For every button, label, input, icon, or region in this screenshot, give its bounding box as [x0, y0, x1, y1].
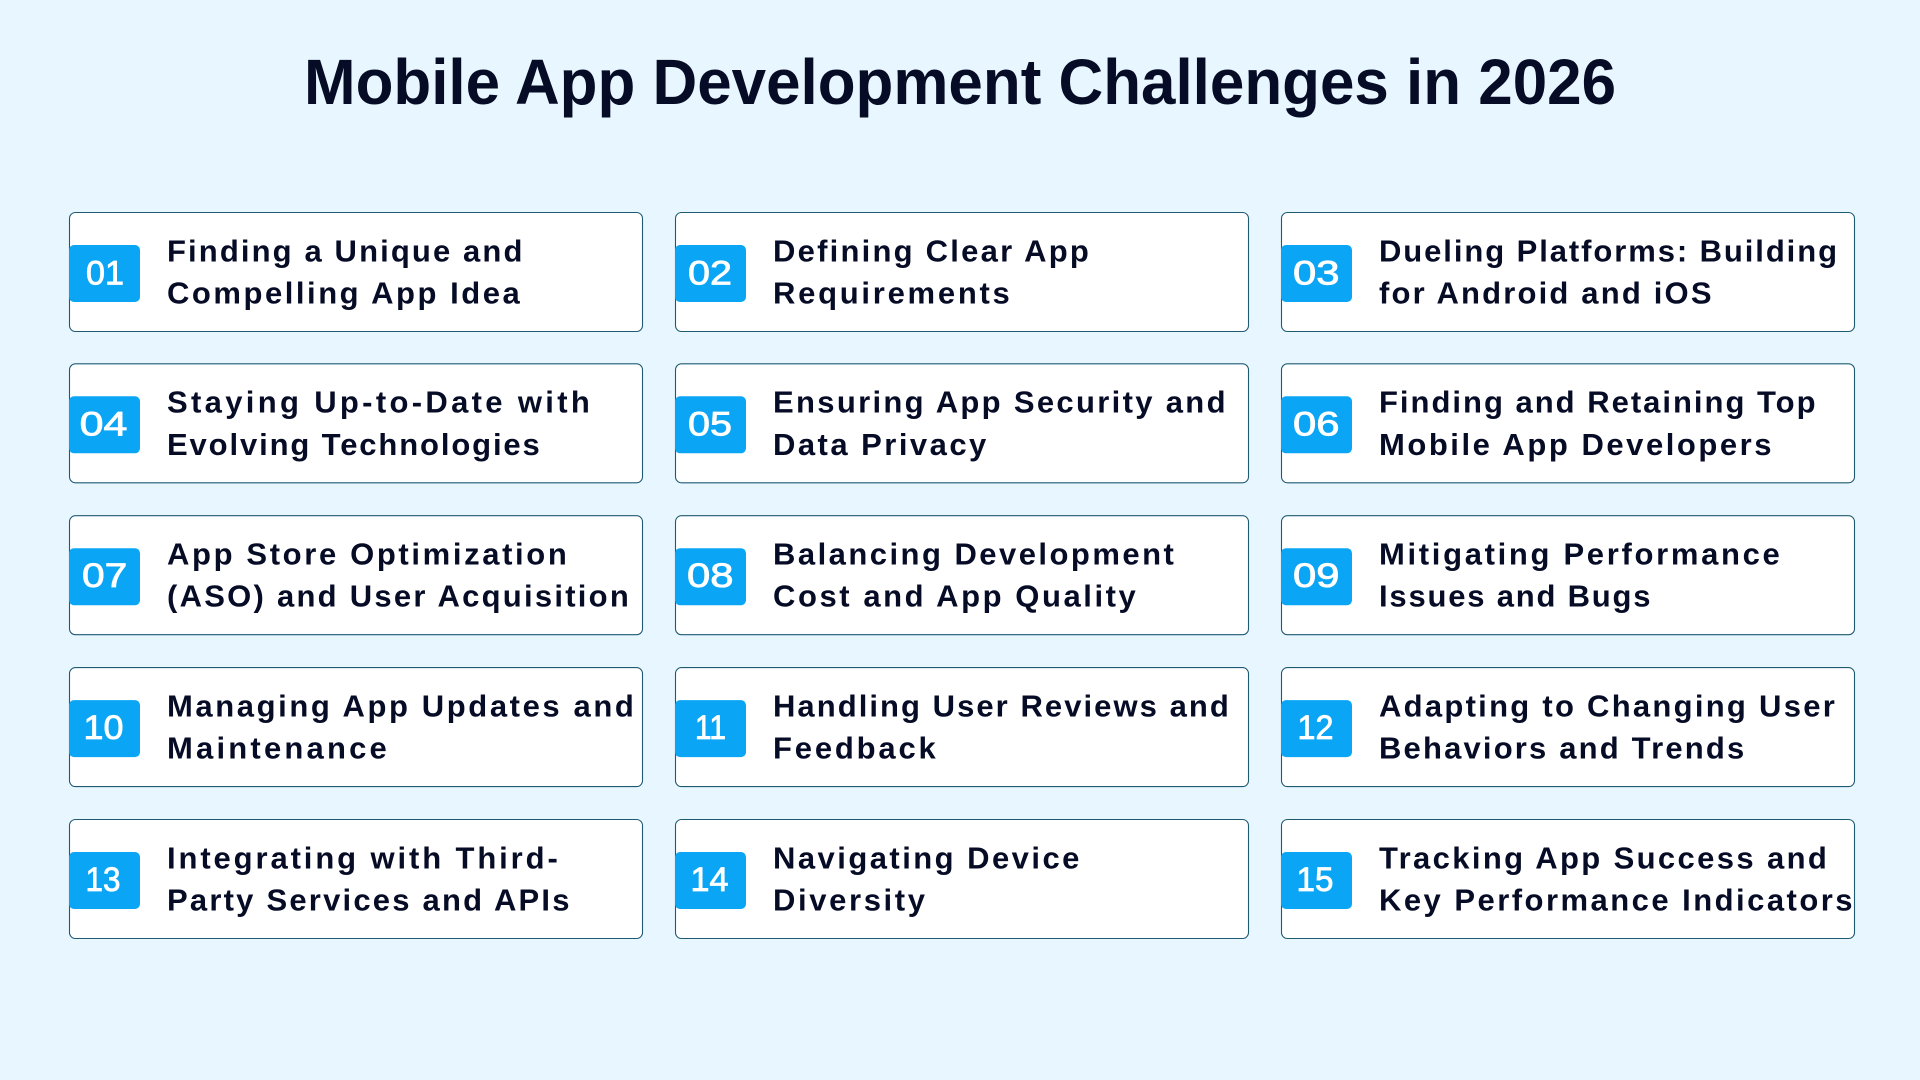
card 05 text: Data Privacy: [773, 427, 987, 462]
card 03: [1281, 212, 1854, 332]
badge 03: 03: [1293, 254, 1340, 292]
card 15 text: [1379, 840, 1852, 917]
card 09: [1281, 516, 1854, 635]
badge 06: [1281, 396, 1352, 453]
badge 10: 10: [84, 709, 124, 747]
card 10 text: Managing App Updates and: [167, 688, 634, 724]
card 08: [675, 516, 1248, 635]
card 11 text: [773, 688, 1229, 765]
card 15 text: Tracking App Success and: [1379, 840, 1827, 876]
card 09 text: Mitigating Performance: [1379, 537, 1780, 572]
card 10 text: [167, 688, 634, 765]
badge 07: 07: [82, 557, 127, 595]
badge 01: 01: [86, 254, 124, 292]
card 07: [69, 516, 642, 635]
badge 12: [1281, 700, 1352, 757]
badge 06: 06: [1293, 406, 1340, 444]
badge 04: [69, 396, 140, 453]
card 07 text: [167, 537, 629, 614]
card 14 text: Navigating Device: [773, 840, 1079, 876]
card 09 text: Issues and Bugs: [1379, 578, 1650, 614]
badge 04: 04: [80, 406, 127, 444]
card 10: [69, 668, 642, 787]
card 06: [1281, 364, 1854, 483]
card 12 text: Behaviors and Trends: [1379, 730, 1744, 765]
card 06 text: Mobile App Developers: [1379, 427, 1772, 462]
card 04 text: [167, 385, 590, 462]
badge 03: [1281, 245, 1352, 302]
card 02 text: Defining Clear App: [773, 234, 1089, 269]
badge 11: 11: [695, 709, 726, 747]
card 06 text: [1379, 385, 1816, 462]
card 05: [675, 364, 1248, 483]
card 08 text: [773, 537, 1174, 614]
card 08 text: Balancing Development: [773, 537, 1174, 572]
card 07 text: App Store Optimization: [167, 537, 567, 572]
card 05 text: [773, 385, 1226, 462]
badge 05: 05: [688, 406, 732, 444]
badge 09: [1281, 548, 1352, 605]
card 02 text: [773, 234, 1089, 310]
card 12 text: Adapting to Changing User: [1379, 688, 1835, 724]
card 02 text: Requirements: [773, 275, 1010, 310]
badge 01: [69, 245, 140, 302]
card 01 text: Compelling App Idea: [167, 275, 521, 310]
badge 14: 14: [690, 861, 728, 899]
card 14: [675, 820, 1248, 938]
card 15: [1281, 820, 1854, 938]
card 04 text: Evolving Technologies: [167, 427, 540, 462]
badge 15: [1281, 852, 1352, 909]
card 04: [69, 364, 642, 483]
badge 08: [675, 548, 746, 605]
card 15 text: Key Performance Indicators: [1379, 882, 1852, 917]
badge 02: 02: [688, 254, 732, 292]
card 09 text: [1379, 537, 1780, 614]
card 03 text: [1379, 234, 1837, 310]
badge 08: 08: [687, 557, 734, 595]
badge 13: 13: [86, 861, 120, 899]
badge 02: [675, 245, 746, 302]
title: Mobile App Development Challenges in 2026: [304, 46, 1616, 118]
card 13 text: Party Services and APIs: [167, 882, 570, 917]
card 01 text: Finding a Unique and: [167, 234, 522, 269]
card 11 text: Handling User Reviews and: [773, 688, 1229, 724]
card 05 text: Ensuring App Security and: [773, 385, 1226, 420]
badge 12: 12: [1298, 709, 1334, 747]
card 03 text: for Android and iOS: [1379, 275, 1712, 310]
badge 14: [675, 852, 746, 909]
card 04 text: Staying Up-to-Date with: [167, 385, 590, 420]
card 01 text: [167, 234, 522, 310]
badge 11: [675, 700, 746, 757]
card 11 text: Feedback: [773, 730, 937, 765]
card 12 text: [1379, 688, 1835, 765]
card 06 text: Finding and Retaining Top: [1379, 385, 1816, 420]
card 08 text: Cost and App Quality: [773, 578, 1137, 614]
card 13: [69, 820, 642, 938]
card 13 text: [167, 840, 570, 917]
card 02: [675, 212, 1248, 332]
card 12: [1281, 668, 1854, 787]
card 14 text: [773, 840, 1079, 917]
card 11: [675, 668, 1248, 787]
card 07 text: (ASO) and User Acquisition: [167, 578, 629, 614]
badge 13: [69, 852, 140, 909]
card 03 text: Dueling Platforms: Building: [1379, 234, 1837, 269]
badge 07: [69, 548, 140, 605]
card 14 text: Diversity: [773, 882, 926, 917]
badge 09: 09: [1293, 557, 1340, 595]
card 01: [69, 212, 642, 332]
badge 10: [69, 700, 140, 757]
badge 05: [675, 396, 746, 453]
badge 15: 15: [1296, 861, 1334, 899]
card 13 text: Integrating with Third-: [167, 840, 558, 876]
card 10 text: Maintenance: [167, 730, 387, 765]
